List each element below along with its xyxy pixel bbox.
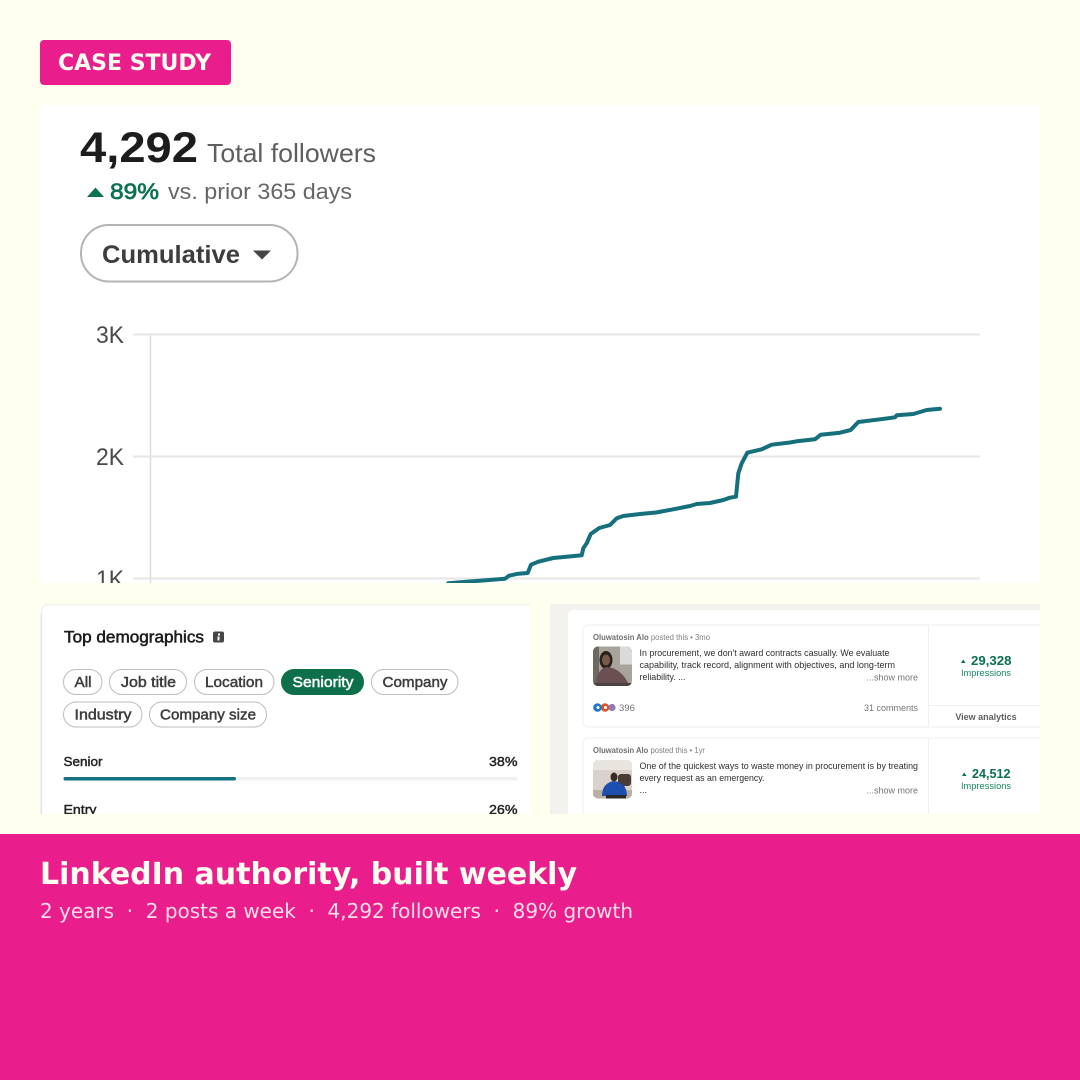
stat: total followers: Total followers xyxy=(207,138,376,168)
filter pills: Industry xyxy=(74,706,132,724)
filter pills: Seniority xyxy=(292,674,354,691)
bar: entry 26%: Entry xyxy=(64,802,97,817)
footer band xyxy=(0,834,1080,1080)
post card: procurement contracts: 396 xyxy=(619,703,635,714)
post card: quickest ways to waste money: ...show more xyxy=(866,786,918,796)
filter pills: Job title xyxy=(121,674,176,691)
post card: quickest ways to waste money: every request as an emergency. xyxy=(640,773,764,783)
post card: quickest ways to waste money: One of the quickest ways to waste money in procurement is by treating xyxy=(640,761,918,771)
stat: growth vs prior period: vs. prior 365 days xyxy=(168,179,352,204)
bar: entry 26%: 26% xyxy=(489,802,518,817)
thumbnail: woman in blue dress xyxy=(593,760,632,799)
post card: quickest ways to waste money xyxy=(582,738,1040,814)
bar: senior 38%: 38% xyxy=(489,754,518,769)
badge: case study xyxy=(40,40,231,85)
line chart: follower growth: 1K xyxy=(96,566,124,593)
post card: quickest ways to waste money: 24,512 xyxy=(972,766,1010,781)
panel: post analytics xyxy=(550,604,1040,814)
post card: procurement contracts: View analytics xyxy=(955,712,1017,722)
stat: growth vs prior period: 89% xyxy=(110,179,159,204)
post card: quickest ways to waste money: Oluwatosin Alo posted this • 1yr xyxy=(593,746,705,755)
panel: total followers chart xyxy=(40,105,1040,593)
line chart: follower growth: 3K xyxy=(96,322,124,349)
line chart: follower growth xyxy=(96,322,980,593)
filter pills: Company xyxy=(382,674,448,691)
post card: procurement contracts: ...show more xyxy=(866,672,918,682)
footer stats line: 2 years · 2 posts a week · 4,292 followers · 89% growth xyxy=(40,899,633,923)
post card: procurement contracts: Impressions xyxy=(961,668,1011,678)
bar: entry 26% xyxy=(64,804,518,814)
post card: quickest ways to waste money: Impressions xyxy=(961,781,1011,791)
post card: procurement contracts: 29,328 xyxy=(971,653,1012,668)
badge: case study: CASE STUDY xyxy=(58,51,212,76)
reaction icons xyxy=(593,703,616,712)
filter pills: Company size xyxy=(160,706,256,724)
footer title: LinkedIn authority, built weekly xyxy=(40,857,577,892)
stat: total followers: 4,292 xyxy=(80,124,198,172)
filter pills xyxy=(64,669,458,727)
heading: top demographics: Top demographics xyxy=(64,628,204,646)
dropdown: cumulative: Cumulative xyxy=(102,241,240,269)
thumbnail: woman in mauve top xyxy=(593,646,632,687)
post card: procurement contracts: Oluwatosin Alo posted this • 3mo xyxy=(593,633,711,642)
dropdown: cumulative xyxy=(81,225,298,282)
post card: procurement contracts xyxy=(583,625,1063,727)
line chart: follower growth: 2K xyxy=(96,444,124,471)
post card: procurement contracts: In procurement, we don't award contracts casually. We evaluate xyxy=(640,648,890,658)
post card: procurement contracts: 31 comments xyxy=(864,703,918,713)
bar: senior 38%: Senior xyxy=(64,754,103,769)
post card: procurement contracts: capability, track record, alignment with objectives, and long-term xyxy=(640,660,895,670)
filter pills: All xyxy=(74,674,92,691)
panel: top demographics xyxy=(40,604,530,834)
post card: quickest ways to waste money: ... xyxy=(640,785,647,795)
bar: senior 38% xyxy=(64,754,518,780)
filter pills: Location xyxy=(205,674,263,691)
stat: total followers xyxy=(80,132,375,168)
post card: procurement contracts: reliability. ... xyxy=(640,672,686,682)
stat: growth vs prior period xyxy=(87,179,352,204)
